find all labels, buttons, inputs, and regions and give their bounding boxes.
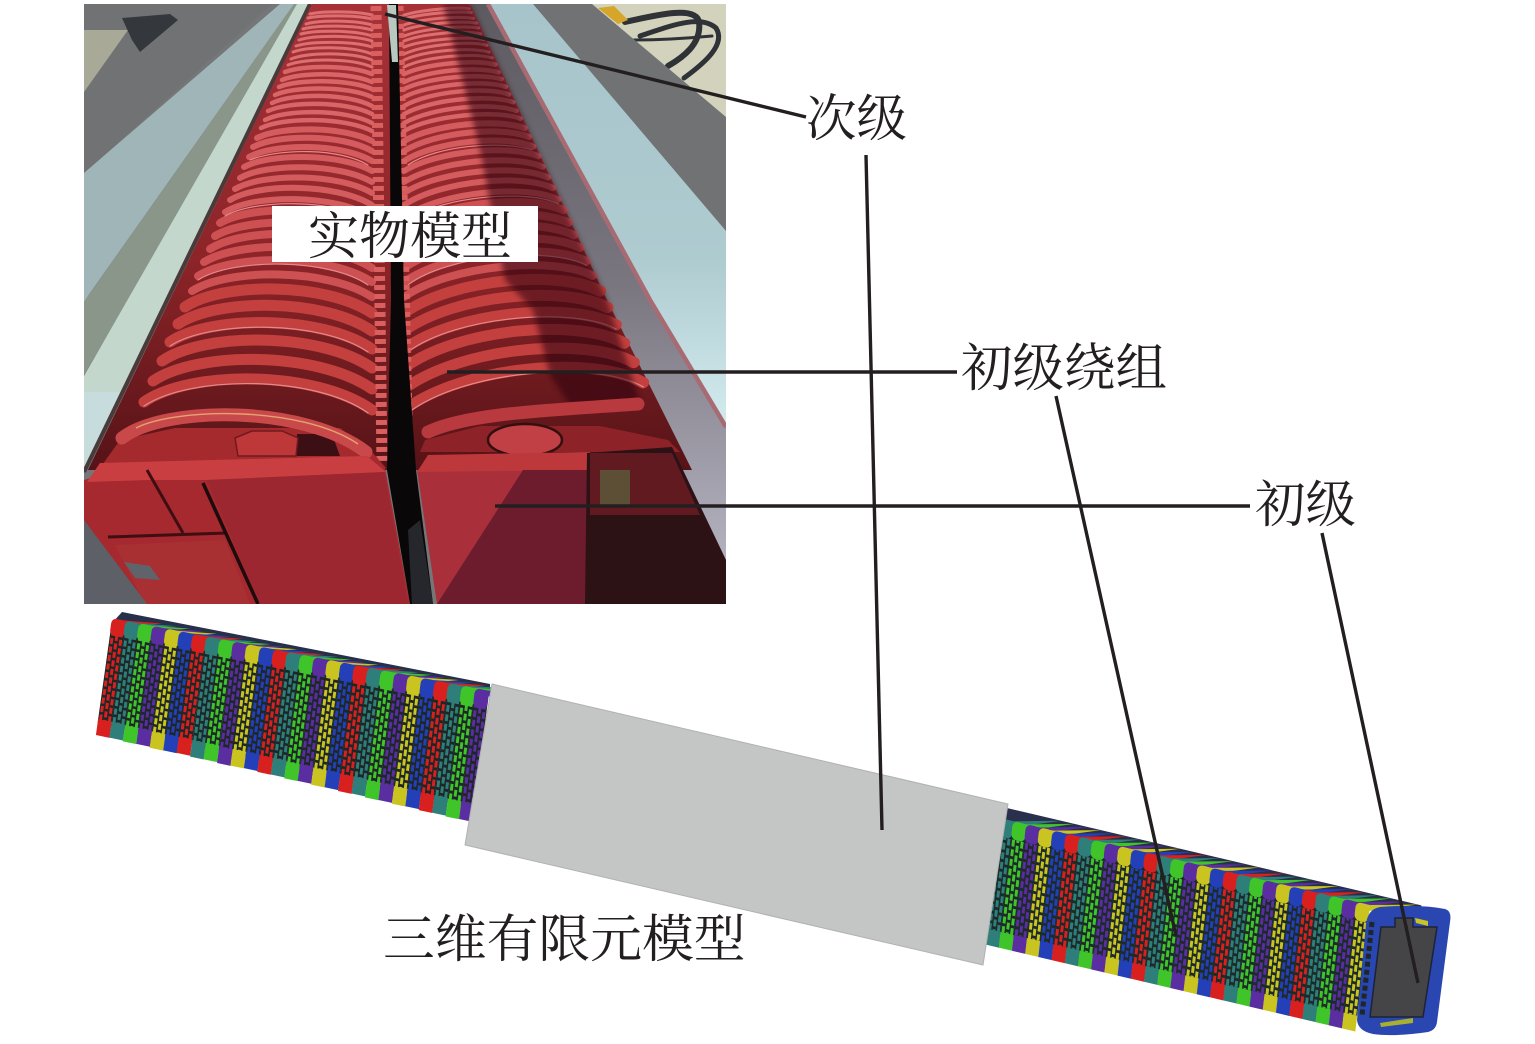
3D model: right winding segment (985, 807, 1421, 1043)
left lower patches (115, 540, 250, 604)
cream ground corner (84, 30, 128, 92)
left coil base (88, 4, 392, 470)
label: primary: 初级 (1255, 477, 1356, 533)
leader: primary winding on 3D model (1056, 396, 1176, 936)
leader: primary on photo (495, 504, 1250, 508)
shadow strip left (84, 4, 300, 375)
right plate (420, 426, 680, 452)
3D model: secondary plate (465, 684, 1008, 965)
left plate shadow (296, 434, 340, 456)
left plate (104, 428, 386, 468)
right dark zone (585, 447, 726, 604)
outer aluminium rail left (84, 4, 294, 302)
3D model: left winding segment (96, 612, 526, 830)
gray chip (124, 562, 160, 580)
right winding arcs (404, 0, 643, 413)
leader: primary winding on photo (447, 370, 957, 374)
right block shadow (437, 470, 590, 604)
left tooth band (376, 6, 382, 464)
right burgundy zone (590, 453, 700, 515)
yellow cable (598, 6, 628, 24)
leader: secondary on 3D model (866, 155, 882, 830)
sun shadow on right winding (443, 4, 640, 405)
label: primary winding: 初级绕组 (961, 341, 1167, 398)
right tooth band (399, 6, 409, 464)
right bolt (488, 424, 562, 456)
centre gap (387, 4, 433, 604)
rosy edge right (488, 4, 726, 427)
left arc highlight (136, 414, 358, 444)
right lower arc (428, 404, 638, 432)
coil edge left (84, 4, 310, 472)
left lower arc (122, 415, 366, 452)
left front seam (203, 483, 258, 604)
cable left (122, 14, 178, 52)
rough patch (600, 470, 630, 505)
rail joint left (84, 392, 122, 470)
right coil base (398, 4, 692, 470)
inner rail left (84, 4, 308, 392)
label: 3D finite element model: 三维有限元模型 (383, 912, 746, 969)
beige ground right (590, 4, 726, 120)
right block (417, 470, 522, 604)
label: secondary: 次级 (806, 91, 907, 147)
gap bottom (408, 520, 433, 604)
left front face (207, 472, 408, 604)
panel: physical model photo (84, 0, 726, 604)
left block seams (108, 470, 227, 537)
left bolt (235, 431, 298, 456)
left block top band (87, 456, 386, 482)
cables right (625, 13, 719, 78)
left block (84, 456, 410, 604)
label box: physical model: 实物模型 (308, 210, 512, 266)
gray plate right (590, 4, 726, 120)
pale rail right (488, 4, 726, 427)
gray corner (84, 520, 147, 604)
left winding arcs (144, 12, 372, 413)
leader lines (385, 14, 1418, 983)
leader: secondary on photo (385, 14, 806, 117)
centre pale strip (387, 5, 398, 62)
leader: primary on 3D model (1322, 533, 1418, 983)
right block top band (417, 452, 590, 472)
ground left (84, 4, 272, 173)
3D model: primary end face (1357, 906, 1450, 1035)
silver rail right (468, 4, 726, 565)
